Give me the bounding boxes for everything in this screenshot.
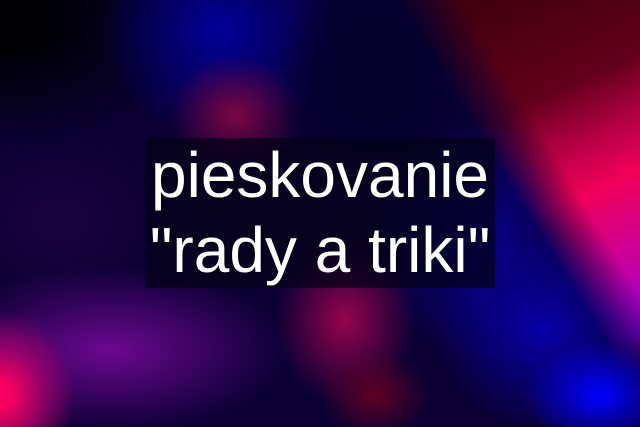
title <box>145 138 495 288</box>
diagonal red to magenta band <box>406 0 640 366</box>
title: "rady a triki" <box>150 214 490 286</box>
title: pieskovanie <box>151 139 489 211</box>
